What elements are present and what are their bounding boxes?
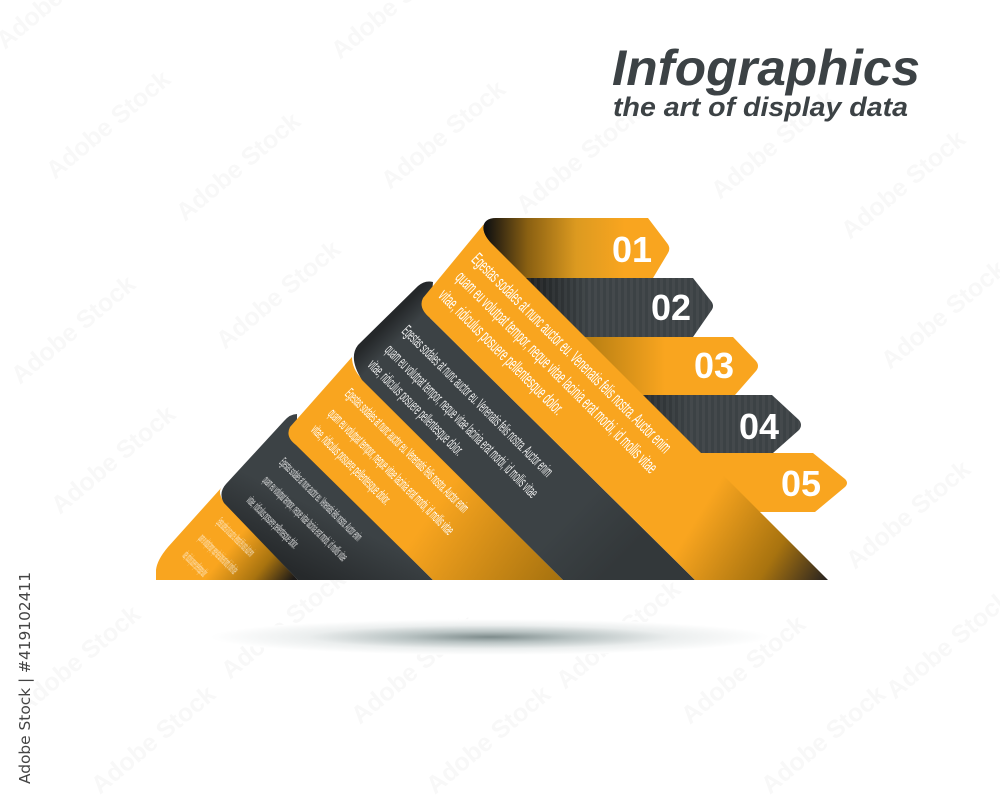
tab 04: 04 — [739, 406, 779, 447]
ribbon 1 text: Egestas sodales at nunc auctor eu. Venenatis felis nostra. Auctor enim — [468, 249, 676, 457]
heading: Infographics — [612, 40, 920, 96]
ribbon 2: dark — [354, 282, 695, 580]
watermark pattern: Adobe Stock — [216, 565, 351, 685]
ribbon 3 text: vitae, ridiculus posuere pellentesque dolor. — [307, 422, 394, 508]
ribbon 4 text — [244, 455, 366, 564]
watermark pattern: Adobe Stock — [211, 235, 346, 355]
watermark pattern: Adobe Stock — [86, 680, 221, 800]
ribbon 2: dark: Egestas sodales at nunc auctor eu. Venenatis felis nostra. Auctor enim — [398, 323, 556, 480]
text: Egestas sodales at nunc auctor eu. Venenatis felis nostra. Auctor enim — [277, 455, 366, 544]
watermark pattern: Adobe Stock — [551, 575, 686, 695]
ribbon 4: dark — [221, 414, 433, 580]
title — [612, 40, 920, 122]
ribbon 3: orange — [288, 357, 563, 580]
subheading: the art of display data — [613, 92, 908, 122]
watermark pattern: Adobe Stock — [421, 680, 556, 800]
tab 05: 05 — [781, 463, 821, 504]
ribbon 2: dark: quam eu volutpat tempor, neque vitae lacinia erat morbi, id mollis vitae — [381, 342, 541, 502]
tab 02 — [505, 278, 713, 337]
watermark pattern: Adobe Stock — [6, 270, 141, 390]
ribbon 2 text — [364, 323, 556, 502]
watermark pattern: Adobe Stock — [836, 125, 971, 245]
floor shadow — [210, 619, 770, 655]
text: quam eu volutpat tempor, neque vitae lacinia erat morbi, id mollis vitae — [260, 473, 351, 564]
ribbon 3: orange: quam eu volutpat tempor, neque vitae lacinia erat morbi, id mollis vitae — [324, 406, 457, 538]
watermark pattern: Adobe Stock — [11, 600, 146, 720]
ribbon 1 text: vitae, ridiculus posuere pellentesque dolor. — [435, 285, 568, 419]
tab 04 — [625, 395, 801, 453]
ribbon 3: orange: Egestas sodales at nunc auctor eu. Venenatis felis nostra. Auctor enim — [341, 386, 472, 516]
tab 03 — [565, 337, 758, 395]
watermark pattern: Adobe Stock — [756, 680, 891, 800]
ribbon 1 text — [435, 249, 676, 477]
tab 05 — [685, 453, 847, 512]
ribbon 5: orange — [156, 487, 298, 580]
tab 01: 01 — [612, 229, 652, 270]
tab 02: 02 — [651, 287, 691, 328]
watermark pattern: Adobe Stock — [171, 107, 306, 227]
watermark pattern: Adobe Stock — [511, 100, 646, 220]
tab 01 — [483, 218, 669, 278]
watermark pattern: Adobe Stock — [46, 400, 181, 520]
ribbon 1 text: quam eu volutpat tempor, neque vitae lacinia erat morbi, id mollis vitae — [452, 267, 662, 477]
tab 03: 03 — [694, 345, 734, 386]
watermark pattern: Adobe Stock — [706, 85, 841, 205]
text: vitae, ridiculus posuere pellentesque dolor. — [244, 493, 302, 551]
stock credit: Adobe Stock | #419102411 — [16, 572, 34, 784]
watermark pattern: Adobe Stock — [41, 65, 176, 185]
watermark pattern: Adobe Stock — [346, 610, 481, 730]
watermark pattern: Adobe Stock — [841, 455, 976, 575]
ribbon 5 text — [180, 515, 258, 580]
ribbon 2 text: vitae, ridiculus posuere pellentesque dolor. — [364, 357, 467, 459]
watermark pattern: Adobe Stock — [676, 610, 811, 730]
ribbon 1: orange — [422, 224, 828, 580]
text: vitae, ridiculus posuere pellentesque dolor. — [180, 548, 211, 580]
ribbon 3 text — [307, 386, 472, 538]
numbered tabs — [483, 218, 847, 512]
watermark pattern: Adobe Stock — [376, 75, 511, 195]
